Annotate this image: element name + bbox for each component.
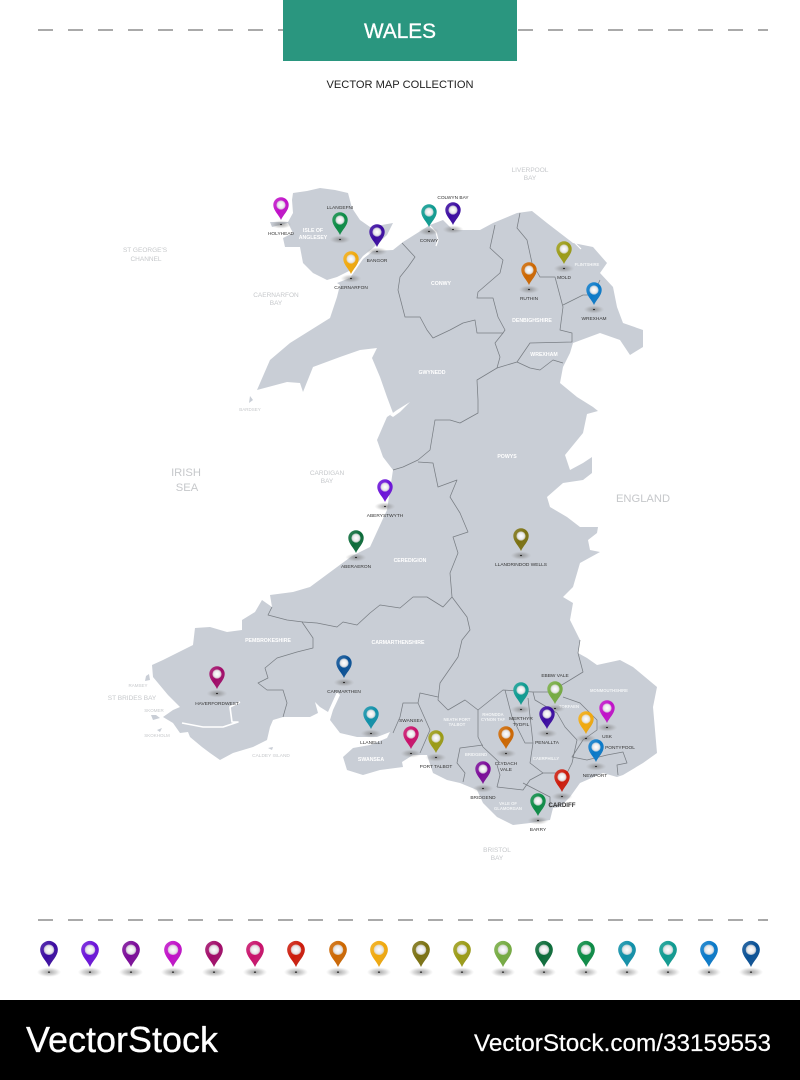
Conwy river and Bala lake (430, 226, 438, 246)
pin: Ruthin (518, 262, 540, 302)
pin: Carmarthen: CARMARTHEN (327, 689, 361, 695)
county labels: POWYS (497, 454, 517, 460)
pin: Pontypool: PONTYPOOL (605, 745, 635, 751)
county labels: WREXHAM (530, 352, 558, 358)
pin: Penallta: PENALLTA (535, 740, 560, 746)
sea labels: BARDSEY (239, 407, 261, 412)
pin: Port Talbot: PORT TALBOT (420, 764, 452, 770)
pin: Caernarfon (334, 251, 368, 291)
pin: Pontypool (576, 711, 635, 751)
sea labels: BAY (270, 300, 283, 307)
pin: Llandrindod Wells: LLANDRINDOD WELLS (495, 562, 547, 568)
pin: Haverfordwest: HAVERFORDWEST (195, 701, 239, 707)
county labels: FLINTSHIRE (575, 262, 600, 267)
pin: Mold (554, 241, 574, 281)
pin: Aberystwyth (367, 479, 404, 519)
sea labels: CALDEY ISLAND (252, 753, 290, 759)
county labels: GWYNEDD (418, 370, 446, 376)
county labels (245, 228, 628, 811)
footer watermark bar (0, 1000, 800, 1080)
county labels: RHONDDA (482, 712, 504, 717)
county labels: CYNON TAF (481, 717, 505, 722)
small islands (145, 396, 273, 750)
map of Wales (145, 188, 657, 825)
county labels: DENBIGHSHIRE (512, 318, 552, 324)
pin: Port Talbot (420, 730, 452, 770)
pin: Llanelli: LLANELLI (360, 740, 382, 746)
sea labels: ST BRIDES BAY (108, 695, 157, 702)
pin: Merthyr Tydfil (509, 682, 533, 728)
sea labels: CHANNEL (130, 256, 162, 263)
pin: Colwyn Bay: COLWYN BAY (437, 195, 469, 201)
sea labels: BAY (321, 478, 334, 485)
pin: Ebbw Vale: EBBW VALE (541, 673, 569, 679)
pin: Barry (528, 793, 548, 833)
county labels: SWANSEA (358, 757, 384, 763)
pin: Llanelli (360, 706, 382, 746)
subtitle: VECTOR MAP COLLECTION (326, 79, 474, 91)
pin: Conwy: CONWY (420, 238, 439, 244)
pin: Swansea (399, 718, 424, 758)
pin: Newport: NEWPORT (583, 773, 607, 779)
pin: Llandrindod Wells (495, 528, 547, 568)
pin: Holyhead (268, 197, 295, 237)
county labels: ISLE OF (303, 228, 323, 234)
header banner: WALES (364, 19, 436, 43)
pin: Penallta (535, 706, 560, 746)
pin: Holyhead: HOLYHEAD (268, 231, 295, 237)
county labels: ANGLESEY (299, 235, 328, 241)
pin: Aberystwyth: ABERYSTWYTH (367, 513, 404, 519)
pin: Usk (596, 700, 618, 740)
pin: Conwy (418, 204, 440, 244)
sea labels: CARDIGAN (310, 470, 344, 477)
county labels: TORFAEN (559, 704, 579, 709)
county labels: VALE OF (499, 801, 517, 806)
pin: Newport (583, 739, 607, 779)
pin: Haverfordwest (195, 666, 239, 707)
county labels: GLAMORGAN (494, 806, 522, 811)
pin: Cardiff: CARDIFF (548, 802, 576, 809)
pin: Usk: USK (602, 734, 613, 740)
footer watermark bar: VectorStock.com/33159553 (474, 1030, 771, 1057)
pin: Ruthin: RUTHIN (520, 296, 539, 302)
county labels: CONWY (431, 281, 451, 287)
sea labels: IRISH (171, 467, 201, 479)
pin: Merthyr Tydfil: MERTHYR (509, 716, 533, 722)
sea labels: ST GEORGE'S (123, 247, 168, 254)
Milford Haven estuary (182, 702, 240, 727)
county labels: NEATH PORT (444, 717, 471, 722)
sea labels: BRISTOL (483, 847, 511, 854)
Isle of Anglesey landmass (270, 188, 393, 280)
pin: Merthyr Tydfil: TYDFIL (513, 722, 530, 728)
pin: Colwyn Bay (437, 195, 469, 234)
county labels: TALBOT (449, 722, 466, 727)
sea labels: ENGLAND (616, 493, 670, 505)
pin: Aberaeron: ABERAERON (341, 564, 372, 570)
county labels: BRIDGEND (465, 752, 487, 757)
pin: Ebbw Vale (541, 673, 569, 713)
footer watermark bar: VectorStock (26, 1019, 219, 1060)
header banner (283, 0, 517, 61)
pin: Clydach Vale (495, 726, 518, 773)
county labels: CEREDIGION (394, 558, 427, 564)
sea labels: SKOKHOLM (144, 733, 170, 738)
pin: Caernarfon: CAERNARFON (334, 285, 368, 291)
sea labels: SKOMER (144, 708, 164, 713)
county labels: PEMBROKESHIRE (245, 638, 291, 644)
mainland Wales landmass (152, 211, 657, 825)
pin: Clydach Vale: VALE (500, 767, 512, 773)
pin: Barry: BARRY (530, 827, 547, 833)
pin: Bangor (366, 224, 388, 264)
pin: Clydach Vale: CLYDACH (495, 761, 518, 767)
pin: Bridgend (470, 761, 496, 801)
pin: Bangor: BANGOR (367, 258, 388, 264)
sea labels: RAMSEY (128, 683, 148, 688)
sea labels: BAY (491, 855, 504, 862)
pin: Wrexham (581, 282, 607, 322)
pin: Bridgend: BRIDGEND (470, 795, 496, 801)
pin: Wrexham: WREXHAM (581, 316, 607, 322)
sea labels: LIVERPOOL (512, 167, 549, 174)
sea labels (108, 167, 670, 862)
pin: Llangefni: LLANGEFNI (327, 205, 353, 211)
legend: row of pin colours (37, 941, 763, 977)
pin: Carmarthen (327, 655, 361, 695)
county labels: CAERPHILLY (533, 756, 559, 761)
pin: Mold: MOLD (557, 275, 571, 281)
sea labels: BAY (524, 175, 537, 182)
sea labels: SEA (176, 482, 199, 494)
pin: Cardiff (548, 769, 576, 809)
pin: Swansea: SWANSEA (399, 718, 424, 724)
county labels: CARMARTHENSHIRE (371, 640, 425, 646)
pin: Llangefni (327, 205, 353, 244)
county labels: MONMOUTHSHIRE (590, 688, 628, 693)
sea labels: CAERNARFON (253, 292, 299, 299)
county boundaries (258, 213, 627, 807)
pin: Aberaeron (341, 530, 372, 570)
